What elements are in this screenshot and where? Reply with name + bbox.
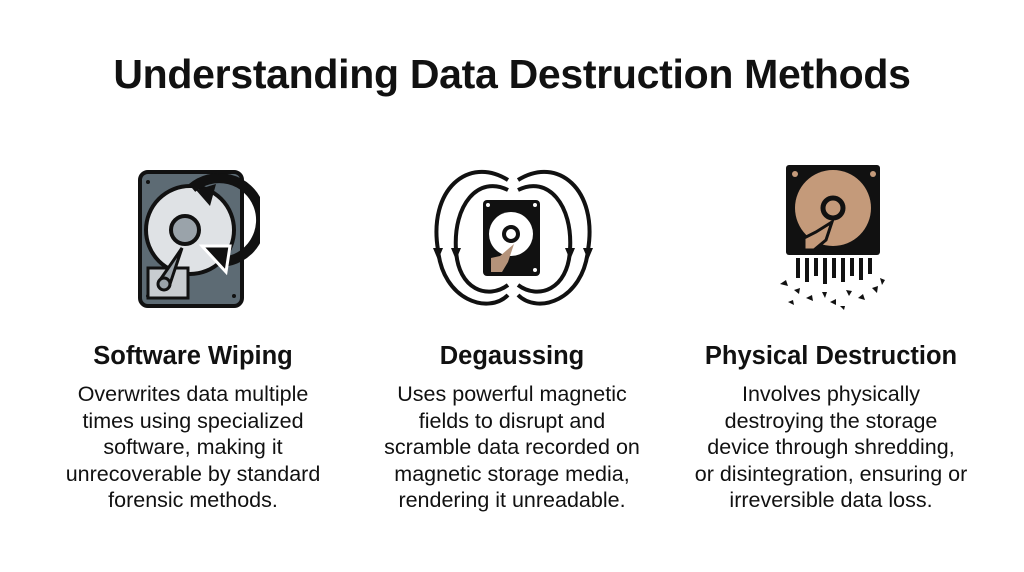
icon: software wiping drive — [138, 170, 260, 308]
column: degaussing — [384, 342, 640, 512]
text: degaussing description — [384, 382, 640, 512]
text: physical destruction description: irreversible data loss. — [729, 488, 933, 512]
text: physical destruction description — [695, 382, 967, 512]
text: physical destruction description: destroying the storage — [725, 409, 937, 433]
text: software wiping description: forensic methods. — [108, 488, 278, 512]
heading: physical destruction: Physical Destruction — [705, 342, 957, 370]
text: physical destruction description: device through shredding, — [707, 435, 955, 459]
text: degaussing description: fields to disrupt and — [419, 409, 605, 433]
title: Understanding Data Destruction Methods — [113, 51, 911, 97]
text: software wiping description: unrecoverable by standard — [66, 462, 320, 486]
text: physical destruction description: Involves physically — [742, 382, 920, 406]
icon: physical destruction shredded drive — [780, 165, 885, 310]
text: software wiping description — [66, 382, 320, 512]
heading: degaussing: Degaussing — [440, 342, 584, 370]
icon: degaussing magnetic field — [433, 170, 593, 306]
text: physical destruction description: or disintegration, ensuring or — [695, 462, 967, 486]
text: degaussing description: scramble data recorded on — [384, 435, 640, 459]
column: physical destruction — [695, 342, 967, 512]
heading: software wiping: Software Wiping — [93, 342, 293, 370]
text: software wiping description: times using specialized — [82, 409, 304, 433]
text: degaussing description: Uses powerful magnetic — [397, 382, 627, 406]
text: degaussing description: magnetic storage media, — [394, 462, 630, 486]
column: software wiping — [66, 342, 320, 512]
text: software wiping description: Overwrites data multiple — [78, 382, 308, 406]
text: degaussing description: rendering it unreadable. — [398, 488, 626, 512]
text: software wiping description: software, making it — [103, 435, 283, 459]
